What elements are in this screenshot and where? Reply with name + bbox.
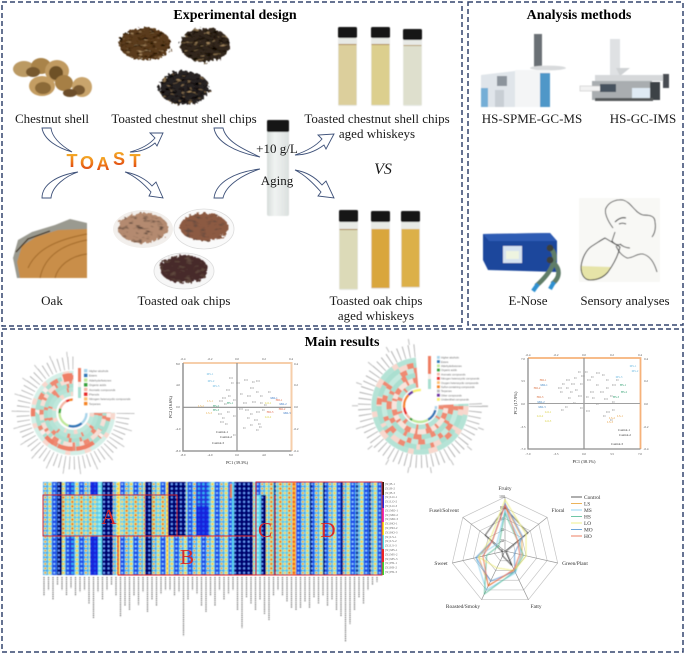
radar legend (571, 495, 601, 540)
PCA left sample labels: Control-1 (216, 430, 228, 434)
label: toasted chestnut shell chips aged whiskeys: Toasted chestnut shell chips (304, 111, 450, 126)
radar axis labels: Fatty (530, 604, 542, 610)
legend: left circular heatmap (78, 368, 131, 406)
PCA left sample labels: Control-2 (220, 435, 232, 439)
PCA left axis label y: PC2 (16.6%) (168, 395, 173, 418)
label: oak: Oak (41, 293, 63, 308)
PCA right tick labels: 3.5 (610, 452, 614, 456)
PCA left sample labels: HS-3 (213, 408, 220, 412)
word art: toast: O (80, 153, 94, 173)
radar axis labels: Fusel/Solvent (429, 508, 459, 514)
PCA right tick labels: 0.0 (582, 353, 586, 357)
PCA right axis label x: PC1 (38.1%) (573, 459, 596, 464)
heatmap compound label ticks (44, 577, 377, 642)
heatmap sample labels: [X] LO-1 (385, 495, 398, 499)
PCA right sample labels: MS-2 (632, 369, 639, 373)
radar series (476, 500, 528, 594)
PCA right sample labels: Control-2 (619, 433, 631, 437)
PCA left sample labels: MS-1 (207, 372, 214, 376)
PCA left tick labels: -8.0 (175, 449, 181, 453)
PCA right sample labels: HO-3 (537, 395, 544, 399)
photo: chestnut shell (13, 58, 92, 97)
heatmap sample labels: [X] HO-1 (385, 522, 398, 526)
radar scale labels (499, 494, 505, 553)
legend: right circular heatmap: Nitrogen heterocyclic compounds (441, 377, 480, 381)
heatmap sample labels: [X] B-1 (385, 482, 395, 486)
radar axis labels: Green/Plant (562, 561, 588, 567)
PCA right tick labels: 0.0 (644, 402, 648, 406)
PCA left axis label x: PC1 (39.3%) (226, 460, 249, 465)
photo: toasted oak chips (113, 209, 234, 289)
word art: toast: S (113, 149, 125, 169)
label: plus 10 g per L: +10 g/L (256, 141, 298, 156)
heatmap sample labels: [X] LS-2 (385, 539, 397, 543)
cluster letters: A (101, 505, 117, 529)
word art: toast: A (96, 154, 110, 174)
PCA right tick labels: 7.0 (638, 452, 642, 456)
PCA left sample labels: MS-2 (208, 379, 215, 383)
chart: PCA right (513, 353, 649, 464)
radar scale labels: 60 (500, 516, 504, 521)
PCA right sample labels: LS-3 (607, 420, 614, 424)
PCA left tick labels: 0.4 (294, 362, 298, 366)
panel: analysis methods (468, 2, 683, 325)
PCA right tick labels: 0.2 (644, 379, 648, 383)
radar legend: LS (584, 502, 590, 508)
PCA right tick labels: 0.2 (610, 353, 614, 357)
legend: right circular heatmap: Other compounds (441, 393, 462, 397)
PCA right tick labels: 0.4 (644, 357, 648, 361)
PCA left tick labels: 4.0 (262, 453, 266, 457)
heatmap group strip (382, 482, 384, 575)
heatmap sample labels: [X] MS-2 (385, 552, 398, 556)
PCA left sample labels: HO-3 (267, 410, 274, 414)
PCA right loadings cluster (558, 372, 619, 420)
PCA left tick labels: 0.4 (289, 357, 293, 361)
PCA left tick labels (175, 357, 299, 457)
PCA left sample labels: MO-3 (283, 411, 291, 415)
label: toasted oak chips aged whiskeys: Toasted oak chips (330, 293, 422, 308)
PCA right sample labels: LO-3 (545, 419, 552, 423)
heatmap sample labels: [X] LO-2 (385, 500, 398, 504)
label: toasted oak chips aged whiskeys: aged whiskeys (338, 308, 414, 323)
vials: toasted chestnut shell chips aged whiskeys (338, 27, 422, 106)
label: toasted oak chips aged whiskeys (330, 293, 422, 323)
heatmap sample labels: [X] B-2 (385, 486, 395, 490)
radar axis labels: Fruity (498, 486, 512, 492)
PCA left sample labels: MS-3 (213, 384, 220, 388)
legend: right circular heatmap: Organic acids (441, 368, 458, 372)
heatmap sample labels: [X] MO-3 (385, 517, 398, 521)
radar scale labels: 100 (499, 494, 505, 499)
heatmap sample labels: [X] MS-3 (385, 557, 398, 561)
label: toasted chestnut shell chips: Toasted chestnut shell chips (111, 111, 257, 126)
PCA right sample labels: HO-1 (540, 378, 547, 382)
radar legend: MS (584, 508, 592, 514)
legend: right circular heatmap: Oxygen heterocyclic compounds (441, 381, 479, 385)
PCA right tick labels: 0.0 (582, 452, 586, 456)
legend: right circular heatmap: Unidentified compounds (441, 398, 470, 402)
PCA left tick labels: -4.0 (175, 427, 181, 431)
PCA right tick labels: -7.0 (525, 452, 531, 456)
label: vs: VS (374, 161, 392, 178)
PCA right tick labels (520, 353, 649, 456)
legend: left circular heatmap: Esters (89, 374, 98, 378)
radar legend: LO (584, 521, 591, 527)
PCA right sample labels: LS-1 (617, 414, 624, 418)
radar axis labels: Floral (552, 508, 565, 514)
legend: left circular heatmap: Aldehyde/ketones (89, 378, 112, 382)
PCA left sample labels: LO-2 (265, 415, 272, 419)
label: HS-GC-IMS: HS-GC-IMS (610, 111, 676, 126)
PCA left sample labels: HO-2 (279, 407, 286, 411)
PCA right tick labels: 3.5 (521, 379, 525, 383)
PCA left sample labels: Control-3 (212, 441, 224, 445)
PCA left tick labels: 0.0 (176, 405, 180, 409)
chart: circular heatmap left (14, 343, 143, 472)
heading: analysis methods: Analysis methods (527, 8, 632, 23)
legend: right circular heatmap: Higher alcohols (441, 356, 460, 360)
legend: left circular heatmap: Nitrogen heterocyclic compounds (89, 397, 131, 401)
radar scale labels: 40 (500, 527, 504, 532)
PCA left sample labels: LO-1 (265, 401, 272, 405)
cluster letters: C (258, 518, 272, 542)
photo: toasted chestnut shell chips (119, 28, 230, 105)
vials: toasted oak chips aged whiskeys (339, 210, 420, 290)
PCA left tick labels: 8.0 (289, 453, 293, 457)
radar legend: Control (584, 495, 601, 501)
legend: left circular heatmap: Terpenes (89, 402, 101, 406)
PCA left sample labels (198, 372, 291, 445)
illustration: sensory analyses (579, 198, 660, 282)
chart: circular heatmap right (355, 336, 500, 471)
legend: left circular heatmap: Higher alcohols (89, 369, 109, 373)
PCA right sample labels: MO-2 (537, 400, 545, 404)
PCA left tick labels: 0.2 (294, 383, 298, 387)
heatmap sample labels: [X] LO-3 (385, 504, 398, 508)
instrument: HS-GC-IMS (580, 39, 669, 101)
label: chestnut shell: Chestnut shell (15, 111, 89, 126)
label: toasted chestnut shell chips aged whiskeys: aged whiskeys (339, 126, 415, 141)
PCA right tick labels: -3.5 (553, 452, 559, 456)
cluster letters (101, 505, 336, 569)
PCA right sample labels: LO-1 (545, 410, 552, 414)
word art: toast: T (66, 151, 78, 171)
PCA left tick labels: -0.2 (293, 427, 299, 431)
chart: compound heatmap (43, 482, 398, 642)
instrument: HS-SPME-GC-MS (481, 34, 566, 107)
radar grid (452, 497, 558, 600)
PCA left tick labels: -4.0 (207, 453, 213, 457)
heatmap cluster outlines (43, 482, 382, 575)
PCA right sample labels: MS-3 (616, 375, 623, 379)
cluster letters: D (320, 518, 336, 542)
heatmap sample labels (385, 482, 398, 574)
instrument: e-nose (483, 233, 558, 291)
legend: right circular heatmap: Sulfur-containing compounds (441, 385, 475, 389)
radar axis labels (429, 486, 588, 610)
PCA left loadings cluster (218, 378, 271, 435)
PCA left sample labels: HS-1 (227, 401, 234, 405)
chart: PCA left (168, 357, 299, 465)
PCA left tick labels: 4.0 (176, 383, 180, 387)
heading: main results: Main results (305, 335, 380, 350)
PCA right sample labels: LS-2 (609, 416, 616, 420)
word art: toast (66, 149, 140, 174)
PCA left sample labels: MO-2 (279, 402, 287, 406)
PCA left sample labels: HS-2 (213, 404, 220, 408)
PCA right sample labels: MO-3 (538, 405, 546, 409)
label: toasted chestnut shell chips aged whiskeys (304, 111, 450, 141)
heading: experimental design: Experimental design (173, 8, 297, 23)
PCA left tick labels: 0.0 (294, 405, 298, 409)
PCA right sample labels: HS-2 (621, 390, 628, 394)
legend: right circular heatmap: Aromatic compounds (441, 372, 466, 376)
legend: left circular heatmap: Organic acids (89, 383, 107, 387)
PCA right sample labels: MO-1 (540, 383, 548, 387)
PCA left sample labels: LS-2 (198, 404, 204, 408)
PCA right sample labels: HO-2 (534, 386, 541, 390)
legend: right circular heatmap (428, 356, 480, 402)
PCA left tick labels: -0.4 (180, 357, 186, 361)
heatmap sample labels: [X] MS-1 (385, 548, 398, 552)
chart: sensory radar (429, 486, 601, 610)
PCA left tick labels: 8.0 (176, 362, 180, 366)
label: HS-SPME-GC-MS: HS-SPME-GC-MS (482, 111, 582, 126)
heatmap sample labels: [X] B-3 (385, 491, 395, 495)
heatmap cells (43, 482, 382, 575)
radar scale labels: 80 (500, 505, 504, 510)
legend: left circular heatmap: Phenols (89, 392, 100, 396)
PCA left tick labels: 0.2 (262, 357, 266, 361)
heatmap sample labels: [X] HS-1 (385, 561, 397, 565)
cluster letters: B (180, 545, 194, 569)
PCA right tick labels: -0.4 (525, 353, 531, 357)
PCA left tick labels: -0.4 (293, 449, 299, 453)
heatmap sample labels: [X] MO-2 (385, 513, 398, 517)
PCA right tick labels: -0.4 (643, 447, 649, 451)
PCA right sample labels: MS-1 (630, 364, 637, 368)
PCA right tick labels: -0.2 (643, 425, 649, 429)
PCA left sample labels: MO-1 (270, 396, 278, 400)
PCA right axis label y: PC2 (17.9%) (513, 391, 518, 414)
heatmap sample labels: [X] HS-2 (385, 566, 397, 570)
vial: base spirit (267, 120, 289, 216)
radar axis labels: Sweet (434, 561, 448, 567)
PCA right sample labels: LO-2 (537, 414, 544, 418)
label: toasted oak chips: Toasted oak chips (138, 293, 230, 308)
panel: main results (2, 329, 683, 652)
PCA right sample labels: Control-3 (611, 442, 623, 446)
PCA right sample labels: Control-1 (618, 428, 630, 432)
heatmap sample labels: [X] MO-1 (385, 508, 398, 512)
PCA right sample labels: HS-3 (613, 395, 620, 399)
radar scale labels: 20 (500, 538, 504, 543)
radar legend: MO (584, 528, 593, 534)
legend: right circular heatmap: Terpenes (441, 389, 452, 393)
PCA left tick labels: -0.2 (207, 357, 213, 361)
PCA right tick labels: -0.2 (553, 353, 559, 357)
radar scale labels: 0 (501, 548, 503, 553)
PCA right tick labels: -7.0 (520, 447, 526, 451)
heatmap sample labels: [X] LS-1 (385, 535, 397, 539)
photo: oak log (13, 219, 87, 278)
PCA right sample labels: HS-1 (620, 383, 627, 387)
PCA left tick labels: 0.0 (235, 357, 239, 361)
label: aging: Aging (261, 173, 294, 188)
PCA left tick labels: 0.0 (235, 453, 239, 457)
PCA right tick labels: 0.0 (521, 402, 525, 406)
label: e-nose: E-Nose (508, 293, 548, 308)
heatmap sample labels: [X] HS-3 (385, 570, 397, 574)
word art: toast: T (130, 151, 140, 171)
legend: left circular heatmap: Aromatic compounds (89, 388, 116, 392)
panel: experimental design (2, 2, 462, 326)
radar axis labels: Roasted/Smoky (446, 604, 480, 610)
label: sensory analyses: Sensory analyses (580, 293, 670, 308)
radar legend: HO (584, 534, 592, 540)
PCA right tick labels: 7.0 (521, 357, 525, 361)
legend: right circular heatmap: Aldehyde/ketones (441, 364, 462, 368)
PCA right tick labels: -3.5 (520, 425, 526, 429)
arrows (42, 128, 334, 198)
PCA right sample labels (534, 364, 639, 446)
legend: right circular heatmap: Esters (441, 360, 449, 364)
PCA left sample labels: HO-1 (276, 398, 283, 402)
heatmap sample labels: [X] HO-2 (385, 526, 398, 530)
PCA left sample labels: LS-1 (207, 399, 214, 403)
PCA left tick labels: -8.0 (180, 453, 186, 457)
PCA left sample labels: LS-3 (206, 411, 212, 415)
radar legend: HS (584, 514, 591, 520)
heatmap sample labels: [X] HO-3 (385, 530, 398, 534)
heatmap sample labels: [X] LS-3 (385, 544, 397, 548)
PCA right tick labels: 0.4 (638, 353, 642, 357)
